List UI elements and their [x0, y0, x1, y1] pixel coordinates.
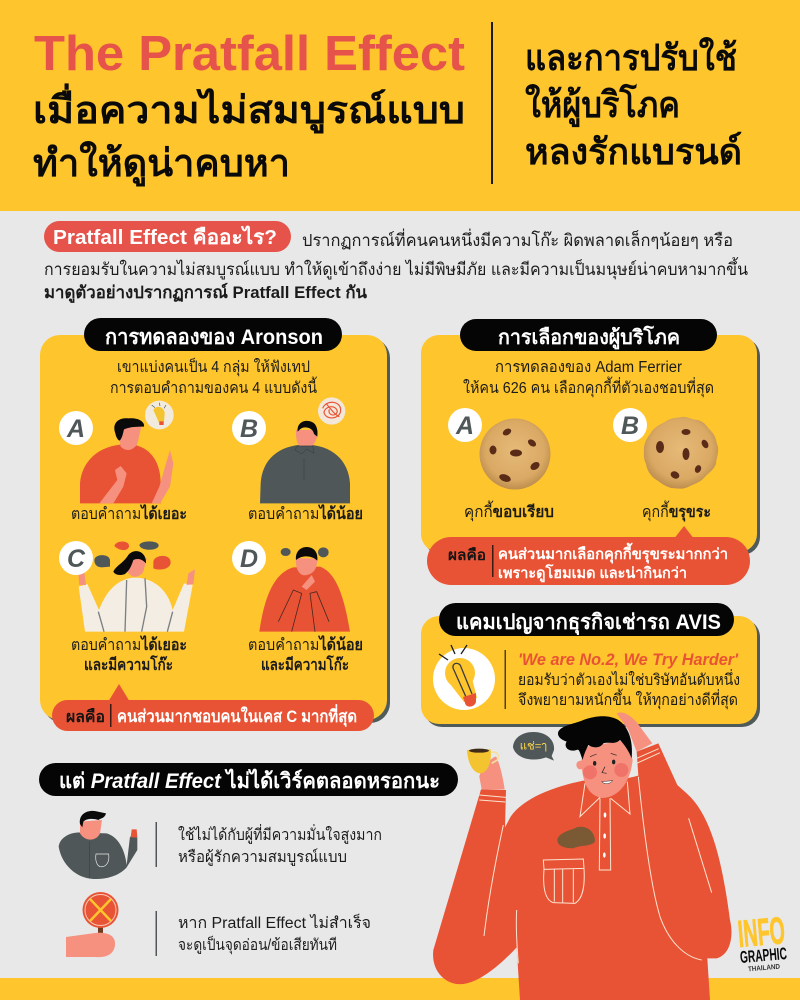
subtitle: และการปรับใช้	[525, 36, 737, 78]
result callout: cookies: ผลคือ	[448, 547, 486, 564]
caption B: ตอบคำถามได้น้อย	[248, 504, 363, 523]
result callout: Aronson	[52, 684, 374, 731]
result callout: cookies: คนส่วนมากเลือกคุกกี้ขรุขระมากกว่า	[498, 542, 728, 564]
panel: AVIS campaign	[421, 603, 760, 727]
divider	[156, 911, 157, 956]
panel heading: AVIS	[439, 603, 734, 636]
AVIS slogan: 'We are No.2, We Try Harder'	[518, 650, 739, 669]
panel: consumer choice	[421, 319, 760, 585]
panel heading: consumer choice: การเลือกของผู้บริโภค	[498, 325, 680, 351]
header band	[0, 0, 800, 211]
coffee stain	[557, 827, 595, 848]
illustration: man with coffee stain	[433, 712, 731, 1000]
panel heading: AVIS: แคมเปญจากธุรกิจเช่ารถ AVIS	[456, 611, 721, 636]
badge D	[232, 541, 266, 575]
caveat text 2: หาก Pratfall Effect ไม่สำเร็จ	[178, 913, 371, 932]
divider	[504, 650, 506, 709]
definition pill: Pratfall Effect คืออะไร?	[53, 225, 277, 249]
badge D: D	[240, 545, 258, 573]
subtitle	[525, 36, 742, 172]
left hand and cup	[467, 749, 505, 789]
panel heading: Aronson: การทดลองของ Aronson	[105, 326, 323, 349]
caption C	[71, 635, 187, 674]
subtitle: หลงรักแบรนด์	[525, 131, 742, 172]
result callout: Aronson: ผลคือ	[66, 708, 105, 726]
icon: hand holding X sign	[66, 892, 118, 957]
raised hand	[617, 712, 652, 752]
heading: caveat: แต่ Pratfall Effect ไม่ได้เวิร์คตลอดหรอกนะ	[59, 768, 440, 793]
badge C	[59, 541, 93, 575]
badge B: B	[621, 412, 639, 440]
caption D: และมีความโก๊ะ	[261, 654, 349, 674]
logo	[736, 910, 788, 974]
title: thai line 1: เมื่อความไม่สมบูรณ์แบบ	[33, 83, 465, 134]
panel intro text	[110, 357, 317, 397]
badge A	[59, 411, 93, 445]
heading: caveat	[39, 763, 458, 796]
caveat text 2: จะดูเป็นจุดอ่อน/ข้อเสียทันที	[178, 935, 337, 955]
panel intro text: ให้คน 626 คน เลือกคุกกี้ที่ตัวเองชอบที่สุด	[463, 376, 714, 398]
caption C: และมีความโก๊ะ	[84, 654, 173, 674]
cookie B	[644, 417, 718, 489]
definition pill	[44, 221, 291, 252]
definition text: การยอมรับในความไม่สมบูรณ์แบบ ทำให้ดูเข้าถึงง่าย ไม่มีพิษมีภัย และมีความเป็นมนุษย์น่าคบหามากขึ้น	[44, 257, 748, 280]
caption D	[248, 635, 363, 674]
icon: confident man	[59, 811, 137, 879]
cookie A	[480, 418, 550, 490]
result callout: Aronson: คนส่วนมากชอบคนในเคส C มากที่สุด	[117, 704, 357, 727]
header divider	[491, 22, 493, 184]
person C	[78, 541, 195, 632]
neck and face	[581, 740, 633, 798]
speech bubble: แช่=ๅ	[520, 740, 547, 752]
result callout: cookies: เพราะดูโฮมเมด และน่ากินกว่า	[498, 563, 687, 583]
divider	[156, 822, 157, 867]
buttons	[603, 812, 606, 858]
person D	[259, 547, 350, 632]
caption A: ตอบคำถามได้เยอะ	[71, 504, 187, 523]
panel intro text: การทดลองของ Adam Ferrier	[495, 359, 682, 376]
hair	[558, 716, 632, 760]
subtitle: ให้ผู้บริโภค	[525, 83, 680, 128]
definition section	[44, 221, 748, 304]
AVIS description	[518, 669, 740, 710]
caveat text 1: หรือผู้รักความสมบูรณ์แบบ	[178, 848, 347, 867]
caveat text 1: ใช้ไม่ได้กับผู้ที่มีความมั่นใจสูงมาก	[178, 824, 382, 845]
badge B: B	[240, 415, 258, 443]
caveat text 1	[178, 824, 382, 867]
definition text	[44, 228, 748, 304]
AVIS description: จึงพยายามหนักขึ้น ให้ทุกอย่างดีที่สุด	[518, 688, 738, 710]
shirt	[433, 743, 731, 1000]
speech bubble	[513, 732, 554, 761]
result callout: cookies	[427, 526, 750, 585]
shirt lines	[479, 749, 712, 963]
caveat text 2	[178, 913, 371, 955]
illustrations of four people	[78, 397, 350, 632]
panel intro text	[463, 359, 714, 398]
definition text: ปรากฏการณ์ที่คนคนหนึ่งมีความโก๊ะ ผิดพลาดเล็กๆน้อยๆ หรือ	[302, 228, 733, 250]
caption C: ตอบคำถามได้เยอะ	[71, 635, 187, 654]
pocket	[543, 859, 584, 903]
bottom band	[0, 978, 800, 1000]
AVIS description: ยอมรับว่าตัวเองไม่ใช่บริษัทอันดับหนึ่ง	[518, 669, 740, 689]
panel intro text: การตอบคำถามของคน 4 แบบดังนี้	[110, 376, 317, 397]
panel heading: consumer choice	[460, 319, 717, 351]
badge A: A	[66, 415, 85, 443]
icon: light bulb	[433, 645, 495, 710]
badge C: C	[67, 545, 86, 573]
panel heading: Aronson	[84, 318, 342, 351]
person B	[260, 397, 350, 503]
person A	[80, 401, 174, 503]
logo: THAILAND	[748, 964, 780, 973]
title: english: The Pratfall Effect	[34, 27, 465, 81]
badge A	[448, 408, 482, 442]
caption D: ตอบคำถามได้น้อย	[248, 635, 363, 654]
badge A: A	[455, 412, 474, 440]
eyes and mouth	[590, 753, 617, 784]
panel: Aronson experiment	[40, 318, 390, 731]
badge B	[613, 408, 647, 442]
title: thai line 2: ทำให้ดูน่าคบหา	[33, 141, 290, 187]
caption cookie A: คุกกี้ขอบเรียบ	[464, 500, 554, 522]
definition text: มาดูตัวอย่างปรากฏการณ์ Pratfall Effect กัน	[44, 282, 367, 304]
badge B	[232, 411, 266, 445]
panel intro text: เขาแบ่งคนเป็น 4 กลุ่ม ให้ฟังเทป	[117, 357, 310, 377]
ears	[576, 761, 585, 769]
caption cookie B: คุกกี้ขรุขระ	[642, 500, 711, 522]
